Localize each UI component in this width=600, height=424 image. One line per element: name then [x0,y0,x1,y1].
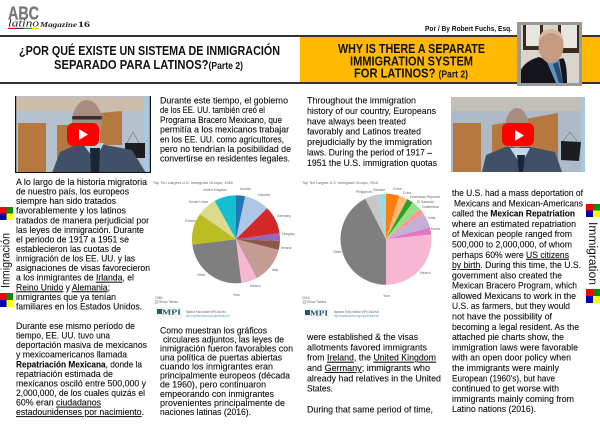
chart: 2016 pie: Korea [431,227,440,231]
text block: Spanish column 1: Durante ese mismo período de [16,321,135,331]
chart: 2016 pie: 2016 [302,296,310,300]
logo: MPI 2016 chart [304,308,379,320]
chart: 2016 pie: China [393,187,402,191]
video: Spanish [15,96,151,173]
panel: English title band [300,36,600,82]
chart: 2016 pie: India [428,216,435,220]
chart: 2016 pie: Vietnam [373,188,386,192]
text block: Spanish column 1 [16,177,150,417]
text block: English column 2: continued to get worse with [452,384,559,395]
text block: English column 2: 500,000 to 2,000,000, of whom [452,240,572,250]
text block: English column 1 top: 1951 the U.S. immigration quotas [307,158,437,169]
text block: Spanish column 2 bottom [160,326,293,417]
text block: Spanish column 1: 60% eran ciudadanos [16,398,101,408]
chart: 2016 pie: Mexico [420,271,431,275]
logo: ABC Latino Magazine 16: latino [8,19,39,30]
logo: MPI 1960 chart: MPI [162,308,181,316]
chart: 1960 pie: Show Tables [159,300,178,304]
text block: Spanish column 2 top [160,96,291,164]
text block: English column 2: called the Mexican Repatriation [452,209,575,220]
text block: Spanish column 1: Reino Unido y Alemania; [16,282,110,292]
video: English [451,97,585,172]
chart: 1960 pie: Year [233,293,241,297]
text block: English column 2: Mexicans and Mexican-Americans [454,198,583,209]
chart: 1960 pie: Hungary [282,232,295,236]
text block: English column 1 bottom: already had relatives in the United [307,373,441,384]
text block: English column 2: U.S. as farmers, but they would [452,301,570,312]
text block: Spanish column 2 top: de los EE. UU. también creó el [160,105,265,115]
text block: Spanish column 1: inmigración de los EE. UU. y las [16,254,135,264]
text block: Spanish column 2 top: pero no tendrían la posibilidad de [160,144,291,154]
text block: English column 2: attached pie charts show, the [452,332,564,343]
text block: Spanish column 2 top: Programa Bracero Mexicano, que [160,115,282,125]
chart: 1960 pie: Top Ten Largest U.S. Immigrant Groups, 1960 [153,181,233,185]
heading: English title: IMMIGRATION SYSTEM [350,54,473,68]
text block: Spanish column 1: deportación masiva de mexicanos [16,340,147,350]
text block: English column 1 top: have always been treated [307,116,406,127]
chart: 2016 pie [302,181,440,304]
logo: ABC Latino Magazine 16 [8,3,90,30]
text block: Spanish column 2 bottom: provenientes principalmente de [160,398,285,408]
text block: English column 2: of Mexican people ranged from [452,229,572,240]
text block: Spanish column 1: a los inmigrantes de Irlanda, el [16,273,134,283]
text block: Spanish column 2 bottom: Como muestran los gráficos [160,326,267,336]
side label: Immigration [586,204,600,303]
logo: MPI 1960 chart: http://migrationpolicy.org/programs/data-hub [186,314,230,318]
text block: English column 2: with an open door policy when [451,353,571,364]
text block: Spanish column 1: tiempo, EE. UU. tuvo una [16,331,111,341]
chart: 2016 pie: Other [333,250,342,254]
text block: Spanish column 1: mexicanos osciló entre 500,000 y [16,378,146,388]
text block: Spanish column 2 bottom: cuando los inmigrantes eran [160,362,273,372]
header rule top [0,35,600,37]
text block: English column 1 bottom: allotments favored immigrants [307,342,427,353]
text block: Spanish column 2 top: Durante este tiempo, el gobierno [160,96,288,106]
text block: Spanish column 2 bottom: inmigración fueron favorables con [160,344,293,354]
text block: Spanish column 1: las leyes de inmigración. Durante [16,225,144,235]
text block: English column 2: government also created the [452,270,562,281]
chart: 2016 pie: Show Tables [307,300,326,304]
text block: Spanish column 1: A lo largo de la historia migratoria [16,177,148,187]
text block: Spanish column 2 top: en los EE. UU. como agricultores, [160,134,284,144]
chart: 1960 pie: Canada [258,193,270,197]
text block: English column 1 top: favorably and Latinos treated [307,127,421,138]
text block: Spanish column 1: siempre han sido tratados [16,196,116,206]
text block: Spanish column 1: establecieron las cuotas de [16,244,121,254]
text block: Spanish column 2 bottom: de 1960), pero continuaron [160,380,266,390]
text block: English column 2: European (1960's), but have [452,373,555,384]
text block: English column 2: Mexican Bracero Program, which [452,281,577,292]
text block: Spanish column 2 bottom: principalmente europeos (década [160,371,291,381]
text block: English column 1 top [307,96,437,169]
text block: Spanish column 1: familiares en los Estados Unidos. [16,301,142,311]
chart: 2016 pie: Cuba [403,191,411,195]
logo: MPI 2016 chart: Migration Policy Institute (MPI) Data Hub [334,310,379,314]
text block: Spanish column 2 top: convertirse en residentes legales. [160,154,290,164]
logo: MPI 1960 chart [156,307,230,319]
text block: English column 2: where an estimated repatriation [451,219,576,230]
text block: English column 2: immigrants mainly coming from [452,394,574,405]
logo: ABC Latino Magazine 16: ABC [8,3,39,23]
text block: English column 2: becoming a legal resident. As the [452,322,579,333]
text block: Spanish column 1: Repatriación Mexicana, donde la [16,359,143,369]
text block: Spanish column 2 bottom: una política de puertas abiertas [160,353,282,363]
text block: English column 2: not have the possibility of [452,312,552,322]
heading: English title: WHY IS THERE A SEPARATE [338,41,485,56]
text block: English column 2: by birth. During this time, the U.S. [452,260,581,271]
chart: 1960 pie: 1960 [155,296,163,300]
chart: 2016 pie: Dominican Republic [410,195,440,199]
text block: English column 1 top: prejudicially by the immigration [307,137,432,148]
chart: 1960 pie: Other [197,273,206,277]
text block: English column 2: perhaps 60% were US citizens [452,250,569,261]
text block: English column 1 top: history of our country, Europeans [307,106,436,117]
text block: Spanish column 1: repatriación estimada de [16,369,113,379]
text block: English column 2: allowed Mexicans to work in the [452,291,576,302]
text block: English column 1 bottom: from Ireland, the United Kingdom [307,353,436,364]
author photo [517,22,582,86]
text block: English column 1 bottom: and Germany; immigrants who [307,363,430,374]
text block: English column 1 bottom: During that same period of time, [307,404,433,415]
chart: 1960 pie: Austria [240,187,251,191]
text block: English column 2: Latino nations (2016). [452,404,536,415]
chart: 1960 pie: Italy [272,268,279,272]
byline: Por / By Robert Fuchs, Esq. [425,24,512,33]
logo: MPI 1960 chart: Migration Policy Institute (MPI) Data Hub [186,310,226,314]
chart: 1960 pie: Mexico [250,284,261,288]
text block: Spanish column 1: 2,000,000, de los cuales quizás el [16,388,145,398]
chart: 1960 pie: Ireland [281,246,291,250]
logo: ABC Latino Magazine 16: Magazine [39,20,78,29]
text block: Spanish column 2 bottom: naciones latinas (2016). [160,407,251,417]
chart: 2016 pie: Guatemala [422,205,439,209]
logo: ABC Latino Magazine 16: 16 [78,20,90,29]
text block: English column 1 bottom [306,332,441,415]
chart: 2016 pie: Top Ten Largest U.S. Immigrant Groups, 2016 [302,181,378,185]
text block: English column 2: immigration laws were favorable [452,342,578,353]
text block: English column 1 bottom: were established & the visas [306,332,418,343]
text block: Spanish column 2 top: permitía a los mexicanos trabajar [160,125,289,135]
text block: Spanish column 1: tratados de manera perjudicial por [16,215,149,225]
icon: play button [502,123,534,146]
text block: English column 2: the immigrants were mainly [452,363,559,374]
text block: English column 1 top: Throughout the immigration [307,96,416,106]
chart: 1960 pie [153,181,295,304]
logo: MPI 2016 chart: http://migrationpolicy.org/programs/data-hub [334,314,379,318]
heading: Spanish title: ¿POR QUÉ EXISTE UN SISTEMA DE INMIGRACIÓN [19,43,280,58]
text block: English column 2 [451,188,583,415]
text block: Spanish column 1: asignaciones de visas favorecieron [16,263,150,273]
heading: Spanish title: SEPARADO PARA LATINOS?(Parte 2) [54,57,243,72]
text block: Spanish column 1: el periodo de 1917 a 1951 se [16,234,129,244]
text block: English column 1 top: laws. During the period of 1917 – [307,148,433,158]
chart: 2016 pie: El Salvador [417,200,435,204]
heading: English title: FOR LATINOS? (Part 2) [354,66,468,80]
text block: English column 1 bottom: States. [307,384,333,395]
text block: Spanish column 2 bottom: empeorando con inmigrantes [160,389,274,399]
chart: 1960 pie: Poland [185,219,196,223]
side label: Inmigración [0,207,13,307]
side label: Immigration: Immigration [586,222,598,285]
text block: Spanish column 2 bottom: circulares adjuntos, las leyes de [163,334,284,344]
chart: 2016 pie: Year [383,294,391,298]
text block: Spanish column 1: favorablemente y los latinos [16,206,126,216]
chart: 2016 pie: Philippines [356,190,373,194]
chart: 1960 pie: Soviet Union [189,200,208,204]
chart: 1960 pie: United Kingdom [203,188,227,192]
logo: MPI 2016 chart: MPI [310,308,328,318]
heading: English title [338,41,485,80]
text block: Spanish column 1: y mexicoamericanos llamada [16,350,128,360]
text block: Spanish column 1: inmigrantes que ya tenían [16,292,116,302]
text block: Spanish column 1: estadounidenses por nacimiento. [16,407,144,417]
chart: 1960 pie: Germany [277,214,291,218]
text block: English column 2: the U.S. had a mass deportation of [452,188,583,199]
side label: Inmigración: Inmigración [0,233,12,288]
text block: Spanish column 1: de nuestro país, los europeos [16,187,129,197]
heading: Spanish title [19,43,280,72]
header rule bottom [0,82,600,84]
icon: play button [67,123,99,146]
